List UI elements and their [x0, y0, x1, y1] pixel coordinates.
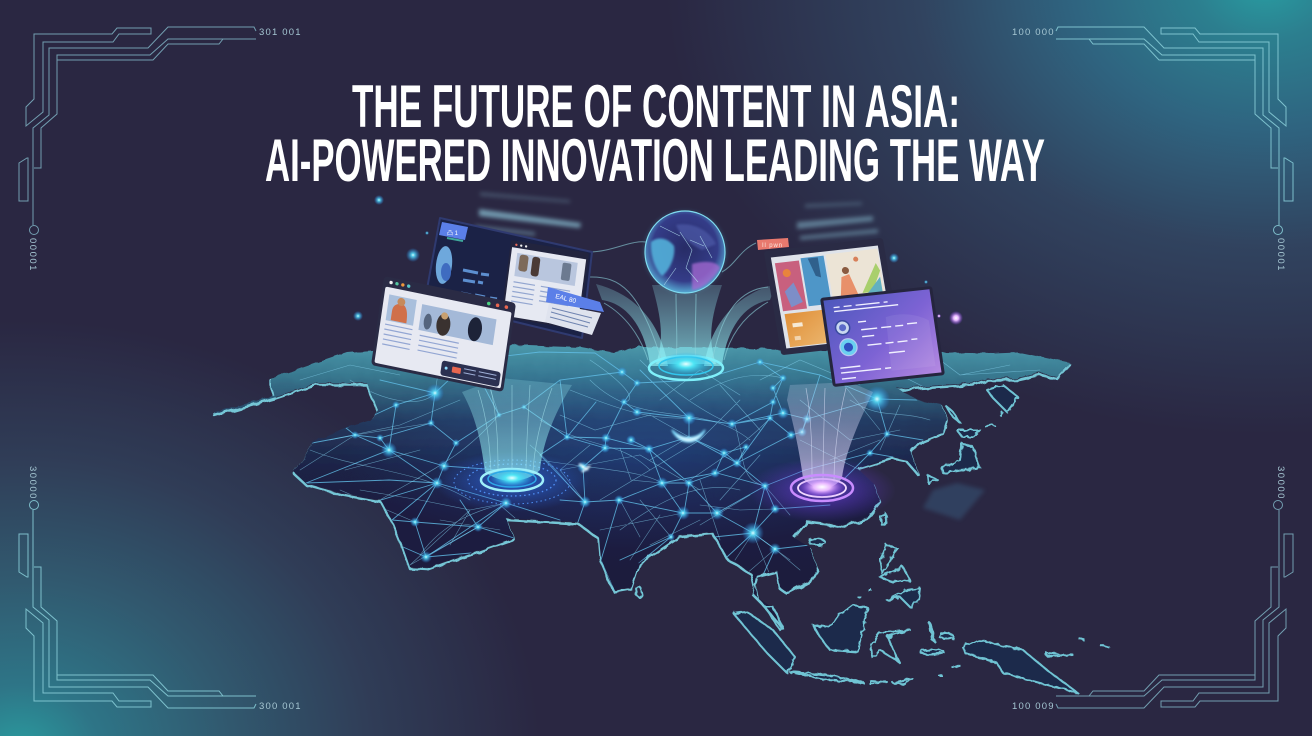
tag: red label: Il pwn [762, 243, 782, 249]
tag: blue label: EAL 80 [555, 293, 577, 305]
tag: red label [757, 238, 789, 250]
circuit binary labels: 00001 [27, 238, 38, 272]
panel: light article window [501, 240, 589, 330]
circuit binary labels: 100 000 [1012, 27, 1055, 38]
islands of east and southeast Asia [636, 385, 1110, 693]
circuit frame: bottom right [1056, 500, 1293, 708]
circuit binary labels: 00001 [1275, 238, 1286, 272]
hologram fountain: centre [589, 242, 776, 366]
glow around left hologram ring [434, 452, 590, 512]
circuit binary labels: 301 001 [259, 27, 302, 38]
map of Asia mainland [215, 345, 1070, 629]
panel: front left article window [371, 276, 516, 392]
title [265, 72, 1045, 194]
network nodes [351, 358, 891, 563]
circuit frame: bottom left [19, 500, 256, 708]
motion streaks above left panels [475, 192, 581, 236]
panel: front right purple window [820, 286, 945, 387]
blue haze over mainland network [398, 383, 881, 532]
dotted data ripple around left ring [454, 460, 570, 504]
hologram ring: centre [649, 352, 723, 380]
panel: back dark dashboard: 凸 1 [447, 230, 459, 237]
faded shape east of Japan [923, 483, 985, 520]
panel: back dark dashboard [425, 218, 592, 338]
hologram funnel: right [787, 382, 873, 488]
network lines on map [300, 352, 1040, 590]
glow around right hologram ring [748, 458, 896, 522]
circuit binary labels: 30000 [1275, 466, 1286, 500]
globe [644, 211, 726, 293]
circuit frame: top right [1056, 27, 1293, 234]
tag: blue label [545, 287, 604, 335]
motion streaks above right panels [797, 202, 878, 240]
panel: right gallery window [764, 238, 900, 355]
circuit frame: top left [19, 27, 256, 234]
sparkles [353, 195, 963, 325]
hologram funnel: left [462, 378, 572, 481]
hologram ring: left [481, 468, 543, 491]
circuit binary labels: 300 001 [259, 701, 302, 712]
circuit binary labels: 100 009 [1012, 701, 1055, 712]
hologram ring: right [791, 475, 853, 501]
circuit binary labels: 30000 [27, 466, 38, 500]
